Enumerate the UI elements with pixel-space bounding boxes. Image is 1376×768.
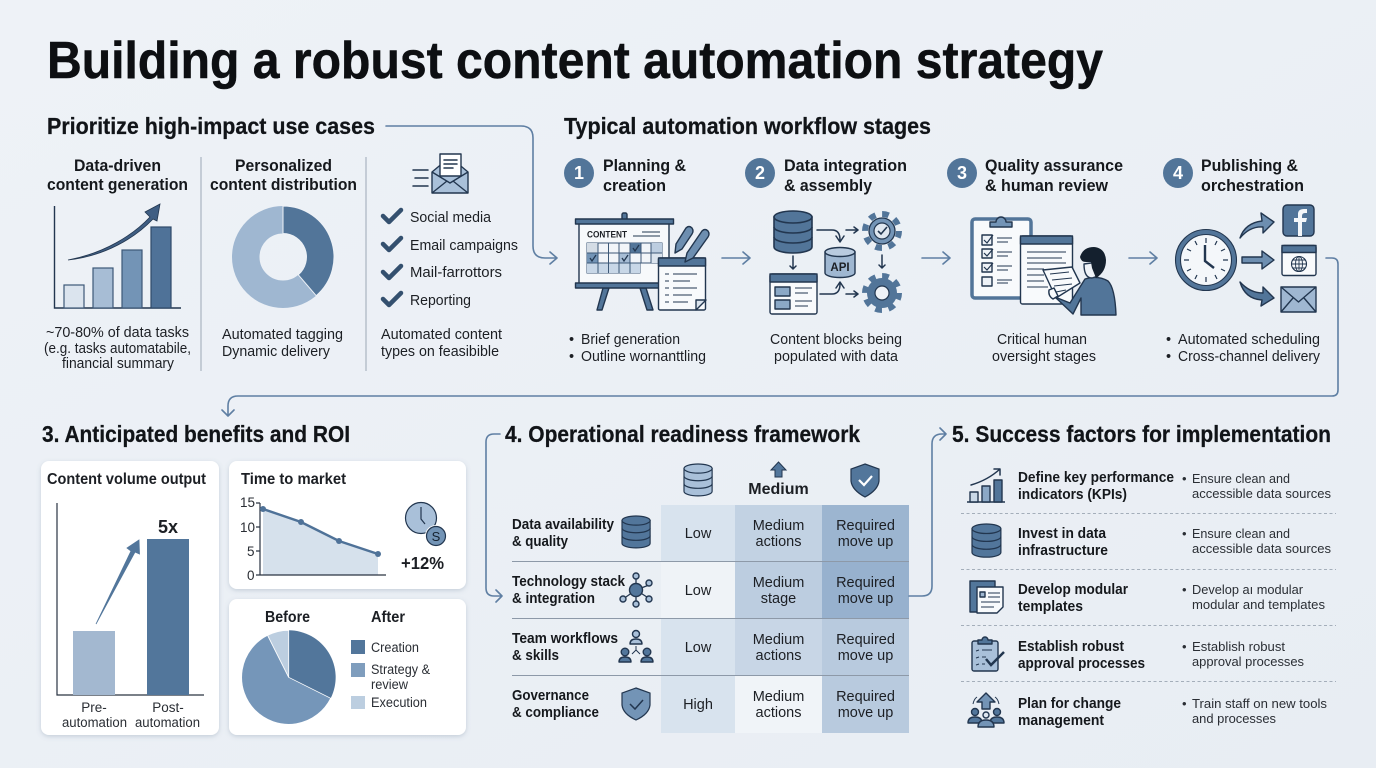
icon: template documents [970, 581, 1003, 613]
row: team workflows: Low [685, 640, 712, 656]
factor: approval processes: • [1182, 639, 1187, 654]
card: time to market [229, 461, 466, 589]
row: technology stack: move up [838, 591, 893, 607]
factor: data infrastructure: infrastructure [1018, 542, 1108, 559]
factor: KPIs: accessible data sources [1192, 486, 1331, 501]
card: time to market: Time to market [241, 471, 347, 488]
panel: benefits and ROI [41, 421, 466, 735]
factor: approval processes: Establish robust [1018, 638, 1124, 655]
factor: modular templates: Develop modular [1018, 581, 1128, 598]
factor: modular templates: Develop aı modular [1192, 582, 1304, 597]
icon: content calendar board [576, 213, 709, 310]
row: governance [512, 687, 895, 721]
row: data availability: Medium [753, 518, 804, 534]
step 4: publishing: 4 [1173, 163, 1183, 183]
card: content volume output [41, 461, 219, 735]
heading: benefits: 3. Anticipated benefits and ROI [42, 421, 350, 447]
column: automated content types [381, 154, 518, 360]
step 4: publishing: orchestration [1201, 176, 1304, 195]
row: team workflows [512, 630, 895, 664]
row: governance: High [683, 697, 713, 713]
factor: data infrastructure: accessible data sources [1192, 541, 1331, 556]
row: data availability: Data availability [512, 516, 615, 533]
row: governance: actions [756, 705, 801, 721]
row: technology stack: Required [836, 575, 895, 591]
factor: approval processes: Establish robust [1192, 639, 1285, 654]
row: data availability: actions [756, 534, 801, 550]
column: automated content types: types on feasibible [381, 344, 499, 360]
column: personalized content distribution: Automated tagging [222, 327, 343, 343]
factor: approval processes: approval processes [1018, 655, 1145, 672]
table header icons [684, 462, 879, 498]
bar chart: pre and post automation: Pre- [81, 700, 107, 715]
row: data availability: Low [685, 526, 712, 542]
row: governance: move up [838, 705, 893, 721]
row: technology stack: Technology stack [512, 573, 626, 590]
step 3: quality assurance: Critical human [997, 332, 1087, 348]
icon: clock and dollar [406, 502, 447, 547]
icon: data flow with API: API [830, 262, 850, 274]
row: technology stack: Medium [753, 575, 804, 591]
card: before and after pie: Before [265, 609, 310, 626]
step 4: publishing [1163, 156, 1321, 365]
column: personalized content distribution: content distribution [210, 175, 357, 194]
column: data-driven content generation: Data-driven [74, 156, 161, 175]
heading: prioritize use cases: Prioritize high-impact use cases [47, 113, 375, 139]
row: data availability: Required [836, 518, 895, 534]
arrow: step 2 to 3 [922, 252, 950, 264]
factor: change management: • [1182, 696, 1187, 711]
step 2: data integration: populated with data [774, 349, 899, 365]
panel: workflow stages [564, 113, 1321, 365]
row: governance: & compliance [512, 704, 599, 721]
legend [351, 640, 430, 710]
step 3: quality assurance: oversight stages [992, 349, 1096, 365]
factor: change management [968, 693, 1327, 729]
step 3: quality assurance: Quality assurance [985, 156, 1123, 175]
row: technology stack: & integration [512, 590, 595, 607]
step 3: quality assurance [947, 156, 1123, 365]
arrow: step 3 to 4 [1129, 252, 1157, 264]
icon: clock to channels [1176, 205, 1316, 312]
line chart: time to market: 15 [240, 495, 255, 510]
arrow: step 1 to 2 [722, 252, 750, 264]
heading: workflow stages: Typical automation workflow stages [564, 113, 931, 139]
step 1: planning and creation: • [569, 332, 574, 348]
factor: modular templates [970, 581, 1325, 615]
icon: data flow with API [770, 211, 899, 314]
column: personalized content distribution: Personalized [235, 156, 332, 175]
column: data-driven content generation: financial summary [62, 356, 175, 372]
factor: data infrastructure [972, 524, 1331, 559]
step 4: publishing: Automated scheduling [1178, 332, 1320, 348]
bar chart: pre and post automation [57, 503, 204, 730]
line chart: time to market: 10 [240, 520, 255, 535]
checklist: Reporting [410, 293, 471, 309]
panel: high-impact use cases [44, 113, 518, 372]
legend: review [371, 677, 408, 692]
legend: Creation [371, 640, 419, 655]
step 4: publishing: Cross-channel delivery [1178, 349, 1321, 365]
heading: readiness: 4. Operational readiness framework [505, 421, 861, 447]
step 2: data integration: & assembly [784, 176, 873, 195]
bar chart: pre and post automation: automation [135, 715, 200, 730]
row: team workflows: Medium [753, 632, 804, 648]
card: content volume output: Content volume output [47, 471, 207, 488]
step 4: publishing: • [1166, 349, 1171, 365]
step 2: data integration: 2 [755, 163, 765, 183]
legend: Strategy & [371, 662, 430, 677]
bar chart: pre and post automation: automation [62, 715, 127, 730]
icon: database [972, 524, 1001, 557]
checklist: Email campaigns [410, 238, 518, 254]
arrow: into readiness framework [486, 434, 502, 602]
step 2: data integration: Data integration [784, 156, 907, 175]
step 1: planning and creation: creation [603, 176, 666, 195]
step 4: publishing: • [1166, 332, 1171, 348]
row: governance: Required [836, 689, 895, 705]
column: data-driven content generation: ~70-80% of data tasks [46, 325, 189, 341]
icon: KPI chart [967, 469, 1005, 502]
step 1: planning and creation [564, 156, 709, 365]
row: team workflows: & skills [512, 647, 559, 664]
column: data-driven content generation [44, 156, 191, 372]
title: Building a robust content automation strategy [47, 32, 1103, 90]
column: personalized content distribution [210, 156, 357, 360]
row: technology stack: stage [761, 591, 796, 607]
factor: modular templates: • [1182, 582, 1187, 597]
table header icons: Medium [748, 481, 809, 498]
factor: modular templates: modular and templates [1192, 597, 1325, 612]
row: governance: Governance [512, 687, 589, 704]
factor: data infrastructure: Ensure clean and [1192, 526, 1290, 541]
factor: approval processes: approval processes [1192, 654, 1304, 669]
factor: approval processes [972, 637, 1304, 672]
bar chart: pre and post automation: Post- [152, 700, 184, 715]
line chart: time to market [240, 495, 386, 583]
step 3: quality assurance: 3 [957, 163, 967, 183]
card: before and after pie: After [371, 609, 405, 626]
checklist [383, 210, 518, 309]
factor: KPIs: indicators (KPIs) [1018, 486, 1127, 503]
panel: success factors [952, 421, 1336, 729]
row: team workflows: actions [756, 648, 801, 664]
arrow: use cases to workflow [386, 126, 557, 264]
factor: data infrastructure: • [1182, 526, 1187, 541]
card: before and after pie [229, 599, 466, 735]
bar chart: rising bars [54, 204, 181, 308]
factor: KPIs: Ensure clean and [1192, 471, 1290, 486]
step 3: quality assurance: & human review [985, 176, 1109, 195]
step 4: publishing: Publishing & [1201, 156, 1298, 175]
panel: operational readiness framework [505, 421, 909, 733]
row: technology stack [512, 573, 895, 607]
pie chart: time allocation [242, 630, 336, 724]
icon: review clipboard and person [972, 217, 1116, 315]
line chart: time to market: 5 [247, 544, 255, 559]
bar chart: pre and post automation: 5x [158, 517, 178, 537]
row: team workflows: Team workflows [512, 630, 618, 647]
step 1: planning and creation: Brief generation [581, 332, 680, 348]
arrow: framework to success factors [909, 428, 946, 596]
factor: data infrastructure: Invest in data [1018, 525, 1107, 542]
column: automated content types: Automated content [381, 327, 502, 343]
checklist: Social media [410, 210, 492, 226]
icon: approval clipboard [972, 637, 1004, 671]
row: data availability: & quality [512, 533, 569, 550]
step 1: planning and creation: Planning & [603, 156, 686, 175]
row: team workflows: Required [836, 632, 895, 648]
factor: KPIs [967, 469, 1331, 503]
step 1: planning and creation: 1 [574, 163, 584, 183]
heading: success factors: 5. Success factors for implementation [952, 421, 1331, 447]
column: data-driven content generation: content generation [47, 175, 188, 194]
row: technology stack: Low [685, 583, 712, 599]
icon: clock and dollar: S [432, 529, 441, 544]
checklist: Mail-farrottors [410, 265, 502, 281]
factor: KPIs: • [1182, 471, 1187, 486]
row: data availability: move up [838, 534, 893, 550]
row: data availability [512, 516, 895, 550]
row: governance: Medium [753, 689, 804, 705]
step 1: planning and creation: • [569, 349, 574, 365]
legend: Execution [371, 695, 427, 710]
factor: change management: management [1018, 712, 1104, 729]
step 2: data integration [745, 156, 907, 365]
column: data-driven content generation: (e.g. tasks automatabile, [44, 341, 191, 357]
line chart: time to market: 0 [247, 568, 255, 583]
factor: KPIs: Define key performance [1018, 469, 1174, 486]
column: personalized content distribution: Dynamic delivery [222, 344, 331, 360]
factor: modular templates: templates [1018, 598, 1083, 615]
row: team workflows: move up [838, 648, 893, 664]
icon: team with up arrow [968, 693, 1004, 727]
factor: change management: and processes [1192, 711, 1276, 726]
table cells [512, 505, 909, 733]
step 2: data integration: Content blocks being [770, 332, 902, 348]
card: time to market: +12% [401, 553, 444, 573]
icon: email with letter [413, 154, 468, 193]
icon: content calendar board: CONTENT [587, 230, 627, 240]
step 1: planning and creation: Outline wornanttling [581, 349, 706, 365]
factor: change management: Plan for change [1018, 695, 1121, 712]
factor: change management: Train staff on new tools [1192, 696, 1327, 711]
arrow: workflow to benefits [222, 258, 1338, 416]
donut chart [246, 206, 334, 296]
